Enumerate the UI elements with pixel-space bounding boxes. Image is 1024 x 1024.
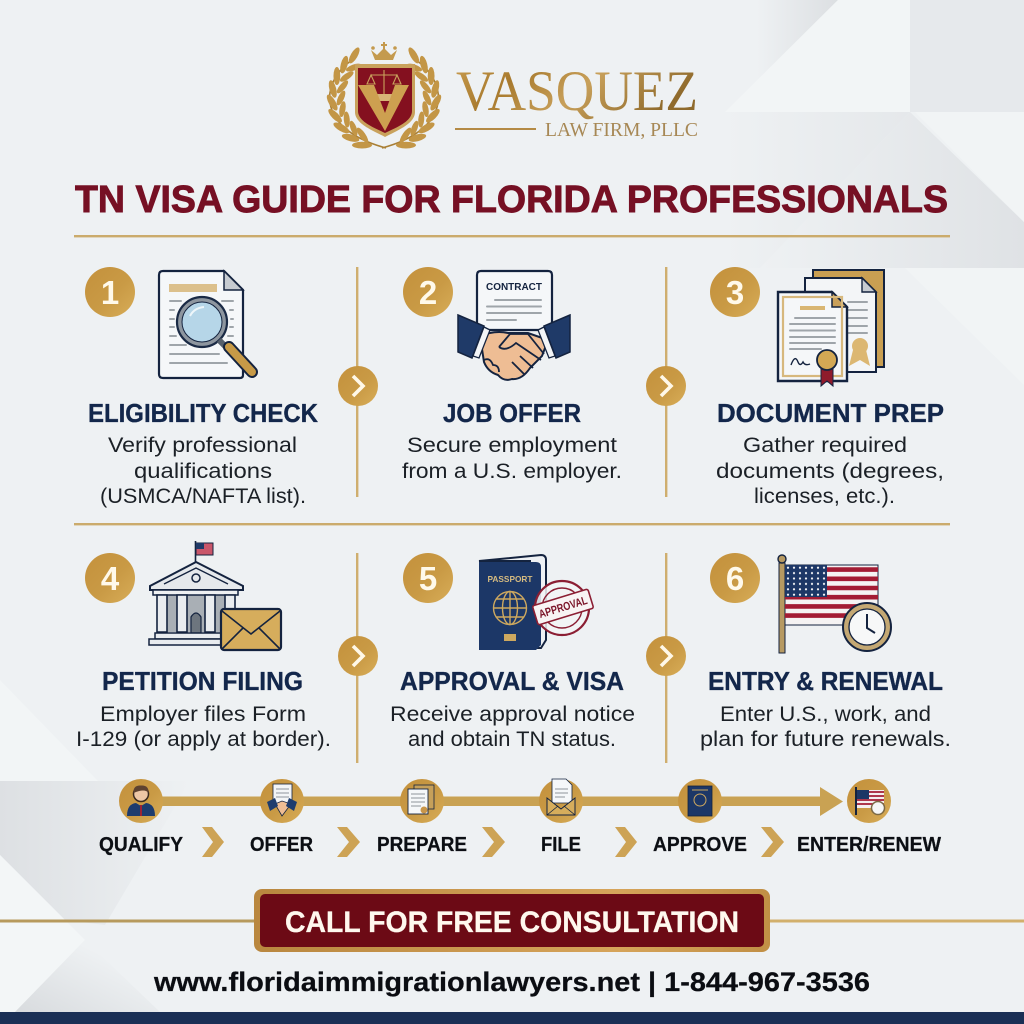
- contact line: www.floridaimmigrationlawyers.net | 1-844-967-3536: [153, 967, 870, 997]
- heading: DOCUMENT PREP: [717, 398, 944, 428]
- icon: laurel wreath left: [325, 46, 386, 149]
- timeline node: enter/renew: [847, 779, 891, 823]
- description: plan for future renewals.: [700, 728, 951, 751]
- panel: step 6 entry and renewal: [700, 553, 951, 751]
- panel: step 4 petition filing: [76, 541, 331, 751]
- timeline labels: PREPARE: [377, 834, 467, 856]
- description: Gather required: [743, 434, 907, 457]
- panel: step 2 job offer: [402, 267, 622, 483]
- description: and obtain TN status.: [408, 728, 616, 751]
- number badge 6: 6: [726, 560, 744, 597]
- description: Employer files Form: [100, 703, 306, 726]
- number badge 5: [403, 553, 453, 603]
- icon: courthouse and envelope: [149, 541, 281, 650]
- icon: crown: [371, 42, 397, 60]
- heading: APPROVAL & VISA: [400, 666, 624, 696]
- description: Enter U.S., work, and: [720, 703, 931, 726]
- description: [700, 703, 951, 751]
- description: [716, 434, 944, 508]
- timeline labels: OFFER: [250, 834, 314, 856]
- logo wordmark: VASQUEZ: [456, 60, 698, 123]
- timeline node: approve: [678, 779, 722, 823]
- number badge 4: [85, 553, 135, 603]
- timeline node: offer: [260, 779, 304, 823]
- timeline labels: QUALIFY: [99, 834, 184, 856]
- heading: ENTRY & RENEWAL: [708, 666, 943, 696]
- icon: shield: [355, 64, 415, 137]
- icon: passport and approval stamp: [479, 555, 594, 650]
- icon: passport and approval stamp: PASSPORT: [488, 574, 533, 584]
- arrow: step 2 to 3: [646, 366, 686, 406]
- panel: step 1 eligibility check: [85, 267, 318, 508]
- icon: contract and handshake: CONTRACT: [486, 281, 543, 293]
- description: documents (degrees,: [716, 460, 944, 483]
- timeline: [99, 779, 941, 857]
- timeline labels: FILE: [541, 834, 581, 856]
- footer bar: [0, 1012, 1024, 1024]
- call to action text: CALL FOR FREE CONSULTATION: [285, 906, 739, 939]
- panel: step 5 approval and visa: [390, 553, 635, 751]
- timeline node: prepare: [400, 779, 444, 823]
- logo: [325, 42, 698, 149]
- title: TN VISA GUIDE FOR FLORIDA PROFESSIONALS: [75, 179, 948, 221]
- number badge 1: 1: [101, 274, 119, 311]
- number badge 3: 3: [726, 274, 744, 311]
- number badge 1: [85, 267, 135, 317]
- timeline arrow: [150, 787, 843, 816]
- panel: step 3 document prep: [710, 267, 944, 508]
- description: I-129 (or apply at border).: [76, 728, 331, 751]
- timeline node: qualify: [119, 779, 163, 823]
- description: [76, 703, 331, 751]
- description: Receive approval notice: [390, 703, 635, 726]
- number badge 5: 5: [419, 560, 437, 597]
- icon: contract and handshake: [458, 271, 570, 380]
- timeline labels: ENTER/RENEW: [797, 834, 941, 856]
- number badge 6: [710, 553, 760, 603]
- icon: document with magnifier: [159, 271, 252, 378]
- number badge 2: [403, 267, 453, 317]
- icon: laurel wreath right: [382, 46, 443, 149]
- description: [100, 434, 306, 508]
- timeline node: file: [539, 779, 583, 823]
- heading: PETITION FILING: [102, 666, 303, 696]
- timeline labels: [99, 834, 941, 856]
- description: from a U.S. employer.: [402, 460, 622, 483]
- description: Secure employment: [407, 434, 617, 457]
- description: [390, 703, 635, 751]
- number badge 2: 2: [419, 274, 437, 311]
- description: licenses, etc.).: [754, 485, 895, 508]
- icon: flag and clock: [778, 555, 891, 653]
- logo subtitle: LAW FIRM, PLLC: [545, 119, 698, 141]
- timeline labels: APPROVE: [653, 834, 747, 856]
- logo rule: [455, 128, 536, 130]
- heading: ELIGIBILITY CHECK: [88, 398, 318, 428]
- number badge 3: [710, 267, 760, 317]
- description: [402, 434, 622, 483]
- icon: passport and approval stamp: APPROVAL: [538, 595, 589, 621]
- number badge 4: 4: [101, 560, 120, 597]
- arrow: step 5 to 6: [646, 636, 686, 676]
- timeline chevrons: [202, 827, 784, 857]
- arrow: step 4 to 5: [338, 636, 378, 676]
- description: Verify professional: [108, 434, 297, 457]
- call to action bar: [0, 889, 1024, 952]
- icon: stacked certificates: [778, 270, 884, 386]
- description: qualifications: [134, 460, 272, 483]
- arrow: step 1 to 2: [338, 366, 378, 406]
- description: (USMCA/NAFTA list).: [100, 485, 306, 508]
- heading: JOB OFFER: [443, 398, 581, 428]
